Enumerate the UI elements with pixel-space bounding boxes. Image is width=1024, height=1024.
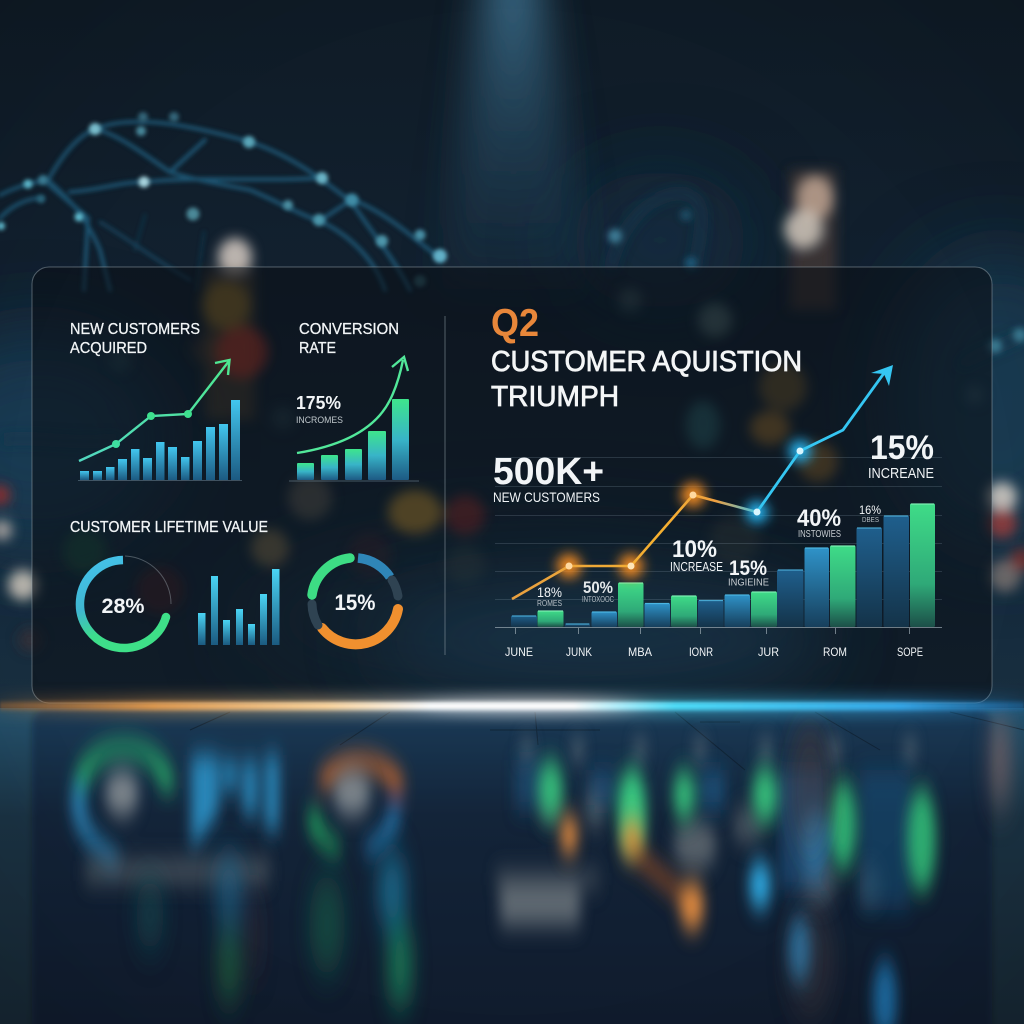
title: Q2: [491, 302, 539, 345]
bar annotations: ROMES: [537, 599, 562, 608]
heading: new customers acquired: [70, 321, 200, 357]
glowing trend line with arrow: [512, 365, 893, 599]
heading: new customers acquired: ACQUIRED: [70, 340, 147, 357]
right network fragment: [0, 193, 1024, 441]
gridlines: [495, 458, 942, 600]
chart axis and ticks: [495, 628, 942, 634]
x-axis month labels: JUR: [758, 647, 779, 659]
donut chart: 28%: [80, 556, 171, 648]
bar annotations: 10%: [672, 536, 717, 563]
title: CUSTOMER AQUISTION: [491, 346, 802, 378]
bar annotations: INGIEINE: [728, 578, 769, 588]
reflected text blobs: [85, 742, 916, 925]
stat: 500K+ new customers: 500K+: [493, 451, 604, 493]
x-axis month labels: SOPE: [897, 647, 923, 659]
bar annotations: 16%: [859, 503, 881, 517]
reflected glowing line: [560, 815, 897, 1024]
glass dashboard panel: [32, 267, 992, 703]
heading: conversion rate: CONVERSION: [299, 321, 399, 338]
stat: 175% increase: [296, 393, 343, 426]
bar annotations: 50%: [583, 578, 613, 597]
x-axis month labels: JUNE: [505, 647, 533, 659]
panel reflection: [32, 708, 992, 1024]
bar annotations: DBES: [862, 517, 879, 524]
stat: 15% top right: [868, 429, 934, 482]
reflected lower left lights: [136, 710, 1010, 1020]
bar chart: lifetime value: [198, 569, 280, 645]
x-axis month labels: [505, 647, 923, 659]
title: [491, 302, 802, 413]
x-axis month labels: ROM: [823, 647, 847, 659]
bar annotations: 18%: [537, 584, 562, 600]
trend curve with arrow: conversion rate: [297, 357, 408, 453]
stat: 175% increase: INCROMES: [296, 415, 343, 426]
donut chart: 15%: 15%: [334, 590, 376, 615]
x-axis month labels: MBA: [628, 647, 652, 659]
donut chart: 28%: 28%: [102, 595, 145, 618]
bar chart: new customers: [78, 400, 242, 480]
heading: conversion rate: RATE: [299, 340, 336, 357]
bar annotations: 40%: [797, 505, 841, 532]
reflected bars: [515, 760, 936, 910]
bokeh city lights: [0, 170, 1024, 652]
trend line with arrow: new customers: [79, 360, 230, 461]
stat: 175% increase: 175%: [296, 393, 341, 413]
bar annotations: INCREASE: [670, 559, 723, 574]
title: TRIUMPH: [491, 381, 619, 413]
x-axis month labels: IONR: [689, 647, 713, 659]
stat: 500K+ new customers: NEW CUSTOMERS: [493, 489, 600, 505]
x-axis month labels: JUNK: [566, 647, 592, 659]
heading: customer lifetime value: CUSTOMER LIFETIME VALUE: [70, 519, 268, 536]
heading: conversion rate: [299, 321, 399, 357]
spotlight beam: [438, 0, 590, 290]
bar annotations: [537, 503, 881, 608]
bar annotations: INTOXOOC: [582, 595, 614, 604]
divider between panel sections: [444, 316, 446, 655]
main bar chart: [511, 504, 935, 627]
bar annotations: INSTOWIES: [798, 529, 841, 540]
stat: 15% top right: 15%: [870, 429, 934, 467]
bar chart: conversion rate: [289, 399, 419, 481]
heading: new customers acquired: NEW CUSTOMERS: [70, 321, 200, 338]
lower panel haze: [370, 590, 830, 690]
network of connected nodes: [0, 112, 447, 290]
background haze: [0, 170, 1024, 710]
donut chart: 15%: [312, 558, 398, 644]
bar annotations: 15%: [729, 557, 767, 580]
floor perspective lines: [190, 712, 1024, 770]
reflected gauges: [78, 748, 400, 862]
stat: 15% top right: INCREANE: [868, 465, 934, 482]
reflective floor: [0, 706, 1024, 1024]
horizon light flare: [0, 696, 1024, 716]
